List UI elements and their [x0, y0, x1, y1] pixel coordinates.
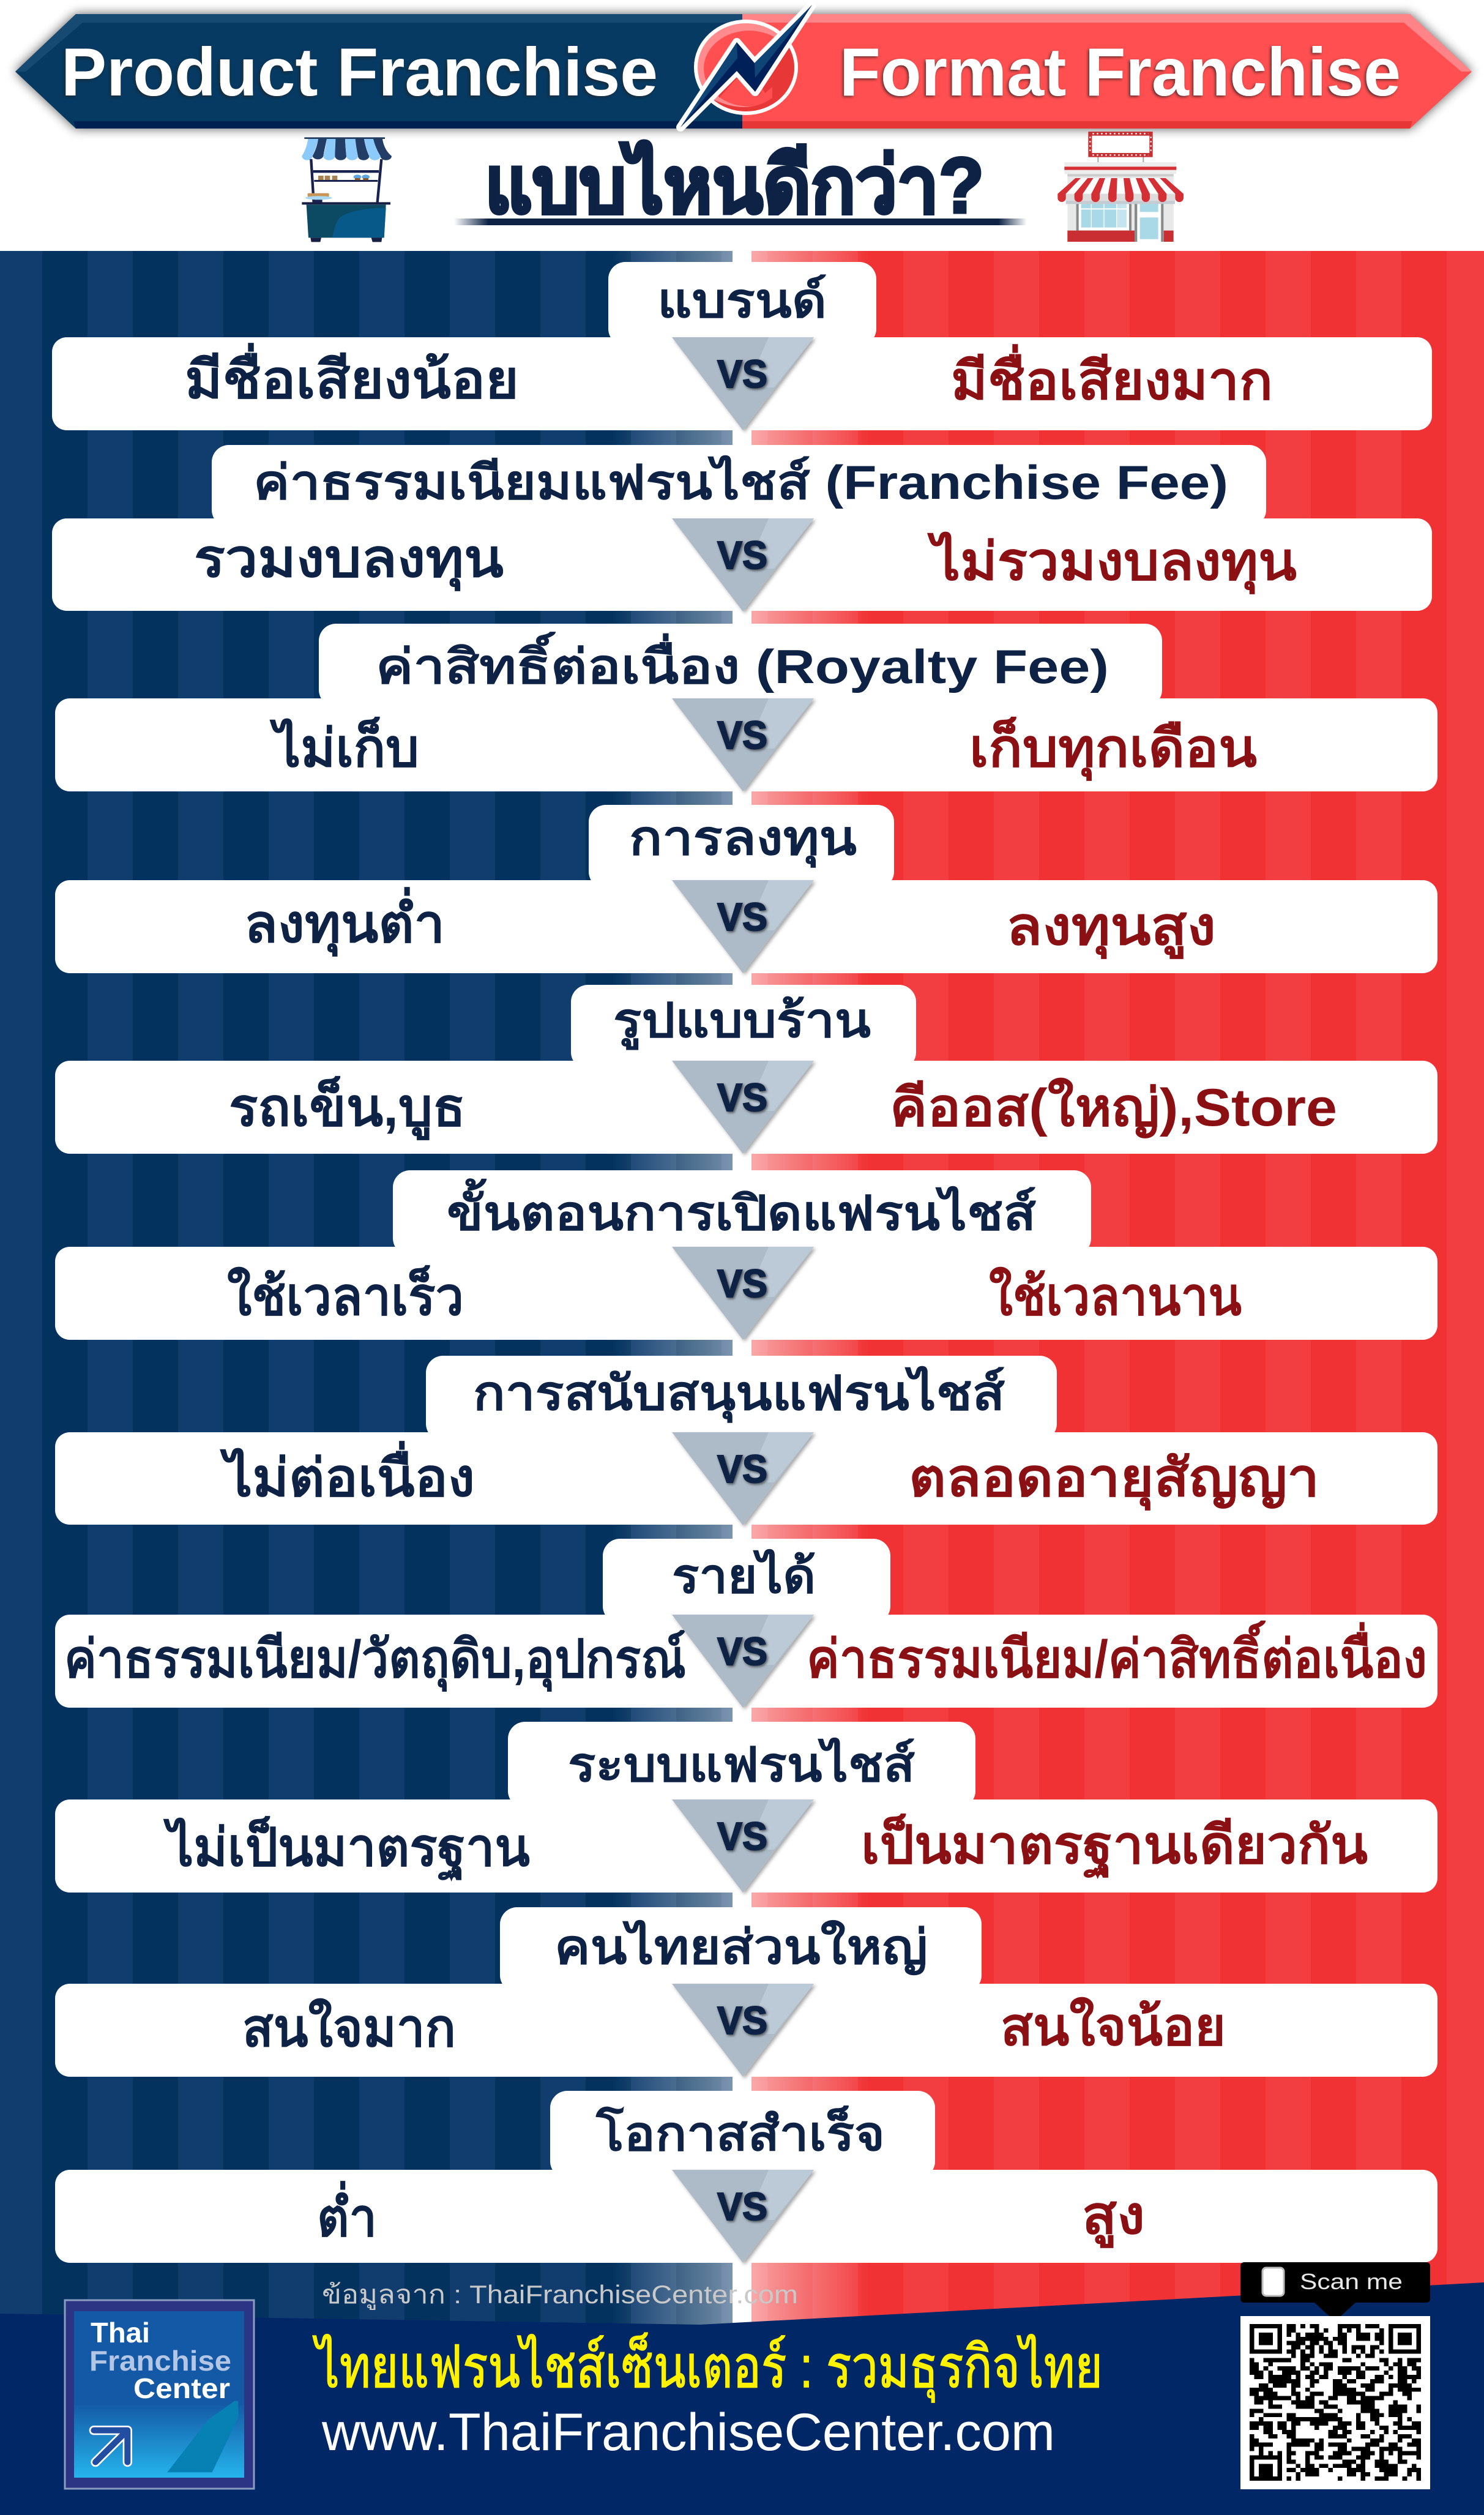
banner left: Product Franchise: Product Franchise [61, 34, 658, 110]
logo: Thai Franchise Center: Thai [91, 2317, 150, 2349]
row 1: brand [52, 262, 1432, 430]
icon: storefront [1057, 132, 1184, 242]
vs badge [672, 1615, 814, 1708]
striped background: blue side [0, 251, 733, 2332]
chip heading [589, 805, 894, 889]
left value: มีชื่อเสียงน้อย [185, 342, 519, 409]
row 5: store format [55, 985, 1437, 1154]
row 2: franchise fee [52, 445, 1432, 611]
right value: ใช้เวลานาน [989, 1267, 1242, 1326]
right value: ลงทุนสูง [1006, 897, 1216, 959]
banner right: Format Franchise [742, 14, 1472, 129]
row 4: investment [55, 805, 1437, 973]
header banner [15, 5, 1472, 129]
left value: ไม่เป็นมาตรฐาน [163, 1815, 530, 1882]
vs badge: VS [717, 1261, 767, 1306]
vs badge [672, 2170, 814, 2263]
vs badge: VS [717, 533, 767, 577]
row 9: franchise system [55, 1722, 1437, 1893]
vs badge: VS [717, 2184, 767, 2229]
right value: ค่าธรรมเนียม/ค่าสิทธิ์ต่อเนื่อง [807, 1620, 1427, 1689]
chip heading: คนไทยส่วนใหญ่ [554, 1919, 928, 1975]
icon: phone [1262, 2268, 1284, 2296]
banner left: Product Franchise [15, 14, 742, 129]
chip heading: ค่าธรรมเนียมแฟรนไชส์ (Franchise Fee) [253, 455, 1228, 509]
left value: สนใจมาก [242, 1998, 456, 2058]
right value: ตลอดอายุสัญญา [909, 1449, 1319, 1511]
row 8: income [55, 1539, 1437, 1708]
right value: ไม่รวมงบลงทุน [927, 531, 1297, 594]
heading: which is better: แบบไหนดีกว่า? [485, 141, 984, 230]
right value: เป็นมาตรฐานเดียวกัน [861, 1813, 1368, 1880]
website: www.ThaiFranchiseCenter.com [321, 2403, 1055, 2462]
vs badge [672, 1432, 814, 1525]
left value: รวมงบลงทุน [194, 529, 504, 591]
right value: มีชื่อเสียงมาก [951, 343, 1273, 411]
chip heading: ค่าสิทธิ์ต่อเนื่อง (Royalty Fee) [376, 632, 1109, 693]
icon: food cart [302, 137, 392, 242]
logo: Thai Franchise Center: Franchise [89, 2345, 231, 2377]
chip heading: การลงทุน [629, 811, 857, 868]
chip heading: รูปแบบร้าน [613, 993, 871, 1050]
vs badge [672, 880, 814, 973]
row 11: chance of success [55, 2091, 1437, 2263]
QR code [1240, 2316, 1430, 2489]
chip heading: ขั้นตอนการเปิดแฟรนไชส์ [447, 1178, 1036, 1240]
chip heading: รายได้ [672, 1549, 816, 1603]
vs badge: VS [717, 713, 767, 757]
vs badge [672, 518, 814, 611]
chip heading [571, 985, 916, 1069]
chip heading [319, 624, 1162, 707]
logo: Thai Franchise Center: Center [133, 2372, 230, 2404]
chip heading [608, 262, 876, 346]
slogan: ไทยแฟรนไชส์เซ็นเตอร์ : รวมธุรกิจไทย [312, 2332, 1103, 2403]
left value: ใช้เวลาเร็ว [227, 1265, 464, 1326]
row 10: most Thais [55, 1907, 1437, 2077]
vs badge [672, 1247, 814, 1340]
logo: Thai Franchise Center [65, 2300, 254, 2489]
left value: ต่ำ [317, 2180, 377, 2248]
row 6: opening process [55, 1170, 1437, 1340]
footer band [0, 2282, 1484, 2515]
left value: ไม่ต่อเนื่อง [220, 1440, 475, 1508]
right value: สนใจน้อย [1001, 1997, 1226, 2057]
right value: คีออส(ใหญ่),Store [890, 1078, 1337, 1139]
chip heading [426, 1356, 1057, 1441]
chip heading [550, 2091, 935, 2178]
row 3: royalty fee [55, 624, 1437, 791]
chip heading [393, 1170, 1091, 1255]
vs badge [672, 1984, 814, 2077]
chip heading [508, 1722, 975, 1808]
left value: ไม่เก็บ [269, 716, 419, 778]
vs badge [672, 1799, 814, 1893]
left value: ลงทุนต่ำ [244, 886, 445, 957]
chip heading: ระบบแฟรนไชส์ [568, 1737, 915, 1792]
chip heading [500, 1907, 982, 1992]
left value: รถเข็น,บูธ [229, 1075, 466, 1140]
chip heading: แบรนด์ [657, 274, 827, 327]
left value: ค่าธรรมเนียม/วัตถุดิบ,อุปกรณ์ [64, 1630, 686, 1692]
vs badge [672, 698, 814, 791]
chip heading [212, 445, 1266, 527]
vs badge: VS [717, 352, 767, 396]
vs badge [672, 337, 814, 430]
chip heading: โอกาสสำเร็จ [595, 2106, 885, 2161]
vs badge: VS [717, 1629, 767, 1673]
chip heading: การสนับสนุนแฟรนไชส์ [473, 1366, 1005, 1423]
vs badge [672, 1061, 814, 1154]
versus lightning badge [680, 5, 812, 129]
right value: เก็บทุกเดือน [969, 716, 1257, 781]
vs badge: VS [717, 895, 767, 939]
vs badge: VS [717, 1447, 767, 1491]
banner right: Format Franchise: Format Franchise [840, 34, 1401, 110]
scan me tag [1240, 2262, 1430, 2317]
vs badge: VS [717, 1998, 767, 2042]
striped background: red side [751, 251, 1484, 2332]
icon: arrow [94, 2401, 239, 2472]
chip heading [603, 1539, 890, 1623]
row 7: franchise support [55, 1356, 1437, 1525]
right value: สูง [1082, 2186, 1145, 2248]
vs badge: VS [717, 1075, 767, 1119]
vs badge: VS [717, 1814, 767, 1858]
source credit: ข้อมูลจาก : ThaiFranchiseCenter.com [322, 2280, 798, 2310]
scan me tag: Scan me [1300, 2269, 1403, 2294]
